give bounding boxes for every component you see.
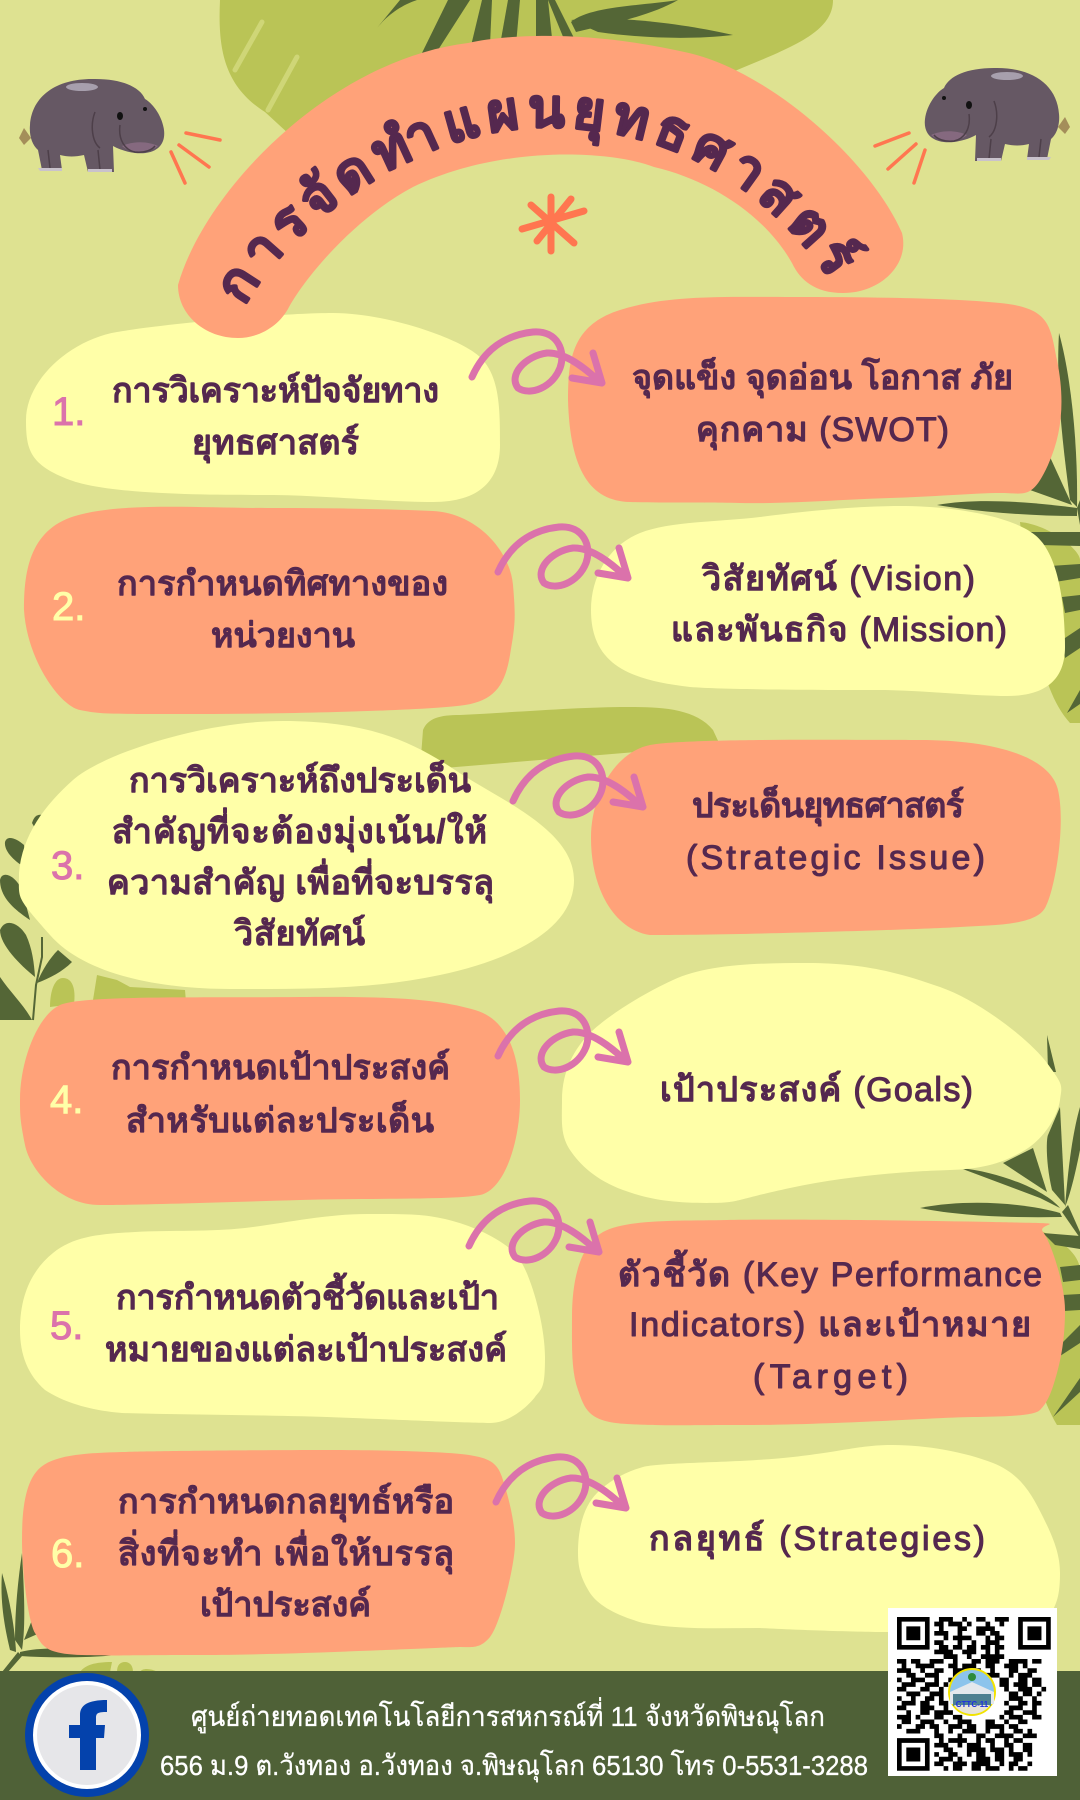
step 2 result text bbox=[671, 559, 1007, 649]
arrow 3 bbox=[513, 756, 643, 815]
panel: step 1 left bbox=[26, 313, 500, 502]
step 5 text bbox=[105, 1272, 507, 1369]
left vine leaf bbox=[0, 815, 186, 1020]
footer text: ศูนย์ถ่ายทอดเทคโนโลยีการสหกรณ์ที่ 11 จังหวัดพิษณุโลก bbox=[191, 1697, 825, 1734]
step 1 result text: จุดแข็ง จุดอ่อน โอกาส ภัย bbox=[632, 356, 1013, 399]
footer text: 656 ม.9 ต.วังทอง อ.วังทอง จ.พิษณุโลก 65130 โทร 0-5531-3288 bbox=[160, 1749, 868, 1783]
step 4 result text: เป้าประสงค์ (Goals) bbox=[660, 1070, 973, 1109]
step 3 text: วิสัยทัศน์ bbox=[233, 914, 365, 953]
spark lines left bbox=[171, 133, 220, 183]
mid olive leaf band bbox=[420, 707, 720, 770]
right palm leaf lower bbox=[920, 1035, 1080, 1425]
top monstera leaf bbox=[220, 0, 833, 135]
step number 1: 1. bbox=[52, 390, 85, 434]
step 4 text: สำหรับแต่ละประเด็น bbox=[126, 1099, 434, 1140]
arrow 5 bbox=[469, 1201, 599, 1260]
panel: step 3 right bbox=[591, 740, 1061, 935]
icon: hippo right bbox=[925, 68, 1070, 161]
panel: step 4 left bbox=[20, 997, 520, 1205]
step 3 result text bbox=[686, 784, 985, 877]
panel: step 6 left bbox=[22, 1450, 515, 1655]
step 4 text: การกำหนดเป้าประสงค์ bbox=[111, 1048, 450, 1087]
step 5 result text: Indicators) และเป้าหมาย bbox=[629, 1306, 1031, 1344]
step 2 result text: วิสัยทัศน์ (Vision) bbox=[701, 559, 975, 598]
step 6 text bbox=[118, 1482, 454, 1624]
step number 2: 2. bbox=[52, 585, 85, 629]
step number 3: 3. bbox=[51, 844, 84, 888]
title text: การจัดทำแผนยุทธศาสตร์ bbox=[222, 94, 870, 304]
title arch bbox=[178, 36, 904, 338]
QR code bbox=[888, 1608, 1057, 1776]
step 1 result text: คุกคาม (SWOT) bbox=[696, 411, 949, 451]
icon: facebook bbox=[25, 1673, 149, 1797]
step 4 text bbox=[111, 1048, 450, 1140]
step 5 result text: (Target) bbox=[753, 1358, 908, 1396]
bottom left palm leaf bbox=[1, 1553, 158, 1672]
arrow 6 bbox=[496, 1457, 626, 1516]
step 2 text: การกำหนดทิศทางของ bbox=[117, 565, 448, 603]
right palm leaf upper bbox=[937, 333, 1080, 723]
step 1 text bbox=[112, 371, 439, 464]
step 6 text: การกำหนดกลยุทธ์หรือ bbox=[118, 1482, 454, 1523]
step 3 result text: (Strategic Issue) bbox=[686, 839, 985, 877]
step 1 result text bbox=[632, 356, 1013, 451]
panel: step 1 right bbox=[568, 297, 1061, 503]
footer bar bbox=[0, 1671, 1080, 1800]
panel: step 2 left bbox=[24, 507, 515, 714]
footer text bbox=[160, 1697, 868, 1783]
step 6 text: สิ่งที่จะทำ เพื่อให้บรรลุ bbox=[118, 1529, 454, 1575]
step number 4: 4. bbox=[50, 1078, 83, 1122]
step 3 text: สำคัญที่จะต้องมุ่งเน้น/ให้ bbox=[112, 807, 487, 853]
step number 6: 6. bbox=[51, 1532, 84, 1576]
icon: hippo left bbox=[19, 79, 164, 172]
step 3 text: ความสำคัญ เพื่อที่จะบรรลุ bbox=[107, 858, 494, 904]
step 2 result text: และพันธกิจ (Mission) bbox=[671, 611, 1007, 649]
step 2 text: หน่วยงาน bbox=[211, 617, 355, 655]
QR logo bbox=[948, 1668, 996, 1716]
arrow 4 bbox=[498, 1011, 628, 1070]
top palm leaf bbox=[377, 0, 733, 57]
step 5 result text bbox=[618, 1249, 1042, 1396]
panel: step 5 right bbox=[572, 1220, 1065, 1425]
step 1 text: การวิเคราะห์ปัจจัยทาง bbox=[112, 371, 439, 410]
step 6 result text: กลยุทธ์ (Strategies) bbox=[649, 1519, 985, 1560]
panel: step 6 right bbox=[578, 1445, 1060, 1632]
step 2 text bbox=[117, 565, 448, 655]
arrow 1 bbox=[472, 332, 602, 391]
panel: step 5 left bbox=[20, 1214, 545, 1423]
step 6 text: เป้าประสงค์ bbox=[200, 1585, 371, 1624]
step 3 text: การวิเคราะห์ถึงประเด็น bbox=[129, 759, 471, 800]
step 5 text: หมายของแต่ละเป้าประสงค์ bbox=[105, 1330, 507, 1369]
arrow 2 bbox=[498, 527, 628, 586]
spark lines right bbox=[875, 133, 925, 183]
step number 5: 5. bbox=[50, 1304, 83, 1348]
QR logo: CTTC-11 bbox=[956, 1700, 989, 1709]
step 1 text: ยุทธศาสตร์ bbox=[192, 423, 360, 464]
step 3 result text: ประเด็นยุทธศาสตร์ bbox=[692, 784, 965, 827]
step 5 result text: ตัวชี้วัด (Key Performance bbox=[618, 1249, 1042, 1294]
step 3 text bbox=[107, 759, 494, 953]
step 5 text: การกำหนดตัวชี้วัดและเป้า bbox=[116, 1272, 499, 1317]
panel: step 3 left bbox=[19, 721, 574, 989]
panel: step 4 right bbox=[562, 963, 1061, 1203]
icon: star bbox=[522, 197, 584, 251]
panel: step 2 right bbox=[591, 506, 1065, 696]
